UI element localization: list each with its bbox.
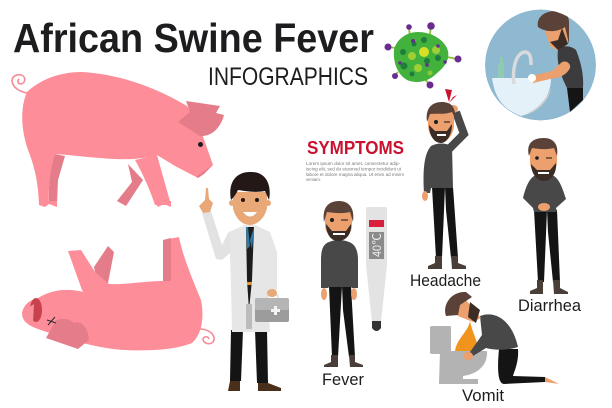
symptoms text: labore et dolore magna aliqua. Ut enim ad minim: [306, 172, 404, 177]
hand: [422, 191, 428, 201]
vomit man: [430, 292, 559, 384]
soap foam: [528, 74, 536, 82]
boots: [428, 256, 466, 269]
raised arm: [202, 211, 231, 260]
diarrhea man: [523, 138, 568, 294]
vomit label: Vomit: [462, 386, 504, 405]
pain mark: [445, 89, 457, 103]
head: [451, 300, 481, 322]
head: [428, 112, 454, 143]
man arm: [531, 61, 570, 83]
legs: [432, 187, 458, 258]
standing pig: [12, 72, 224, 207]
doctor: [199, 172, 289, 391]
doctor legs: [230, 330, 268, 383]
doctor head: [233, 192, 267, 225]
sink: [492, 78, 551, 116]
man head: [544, 27, 568, 50]
toilet: [430, 326, 451, 354]
legs: [498, 349, 545, 384]
title: African Swine Fever: [13, 15, 374, 61]
thermometer: [366, 207, 387, 331]
virus spikes: [388, 26, 457, 85]
virus caps: [384, 22, 462, 89]
hand washing scene: [485, 10, 596, 120]
medical case: [255, 295, 289, 322]
virus: [384, 22, 462, 89]
doctor hand: [267, 289, 277, 297]
raised arm: [449, 112, 464, 149]
symptoms text: veniam.: [306, 177, 321, 182]
torso: [424, 144, 453, 193]
vomit: [455, 321, 478, 351]
faucet: [513, 52, 531, 84]
temperature reading: 40℃: [370, 233, 384, 257]
doctor hair: [230, 172, 270, 200]
headache label: Headache: [410, 271, 481, 290]
subtitle: INFOGRAPHICS: [208, 63, 368, 91]
scene background: [485, 10, 596, 120]
fever man: [321, 201, 363, 367]
doctor coat: [229, 225, 277, 332]
virus body: [394, 32, 448, 82]
torso and arm: [470, 314, 518, 356]
man torso: [558, 46, 583, 88]
symptoms text: Lorem ipsum dolor sit amet, consectetur adip-: [306, 161, 401, 166]
dead pig: [22, 237, 214, 350]
diarrhea label: Diarrhea: [518, 296, 582, 315]
symptoms heading: SYMPTOMS: [307, 138, 404, 158]
symptoms text: iscing elit, sed do eiusmod tempor incididunt ut: [306, 166, 402, 172]
fever label: Fever: [322, 370, 364, 389]
raised hand: [199, 188, 213, 213]
shirt and tie: [246, 227, 254, 310]
doctor shoes: [228, 381, 281, 391]
symptoms text: [306, 161, 404, 182]
headache man: [422, 89, 466, 269]
soap bottle: [498, 57, 504, 78]
